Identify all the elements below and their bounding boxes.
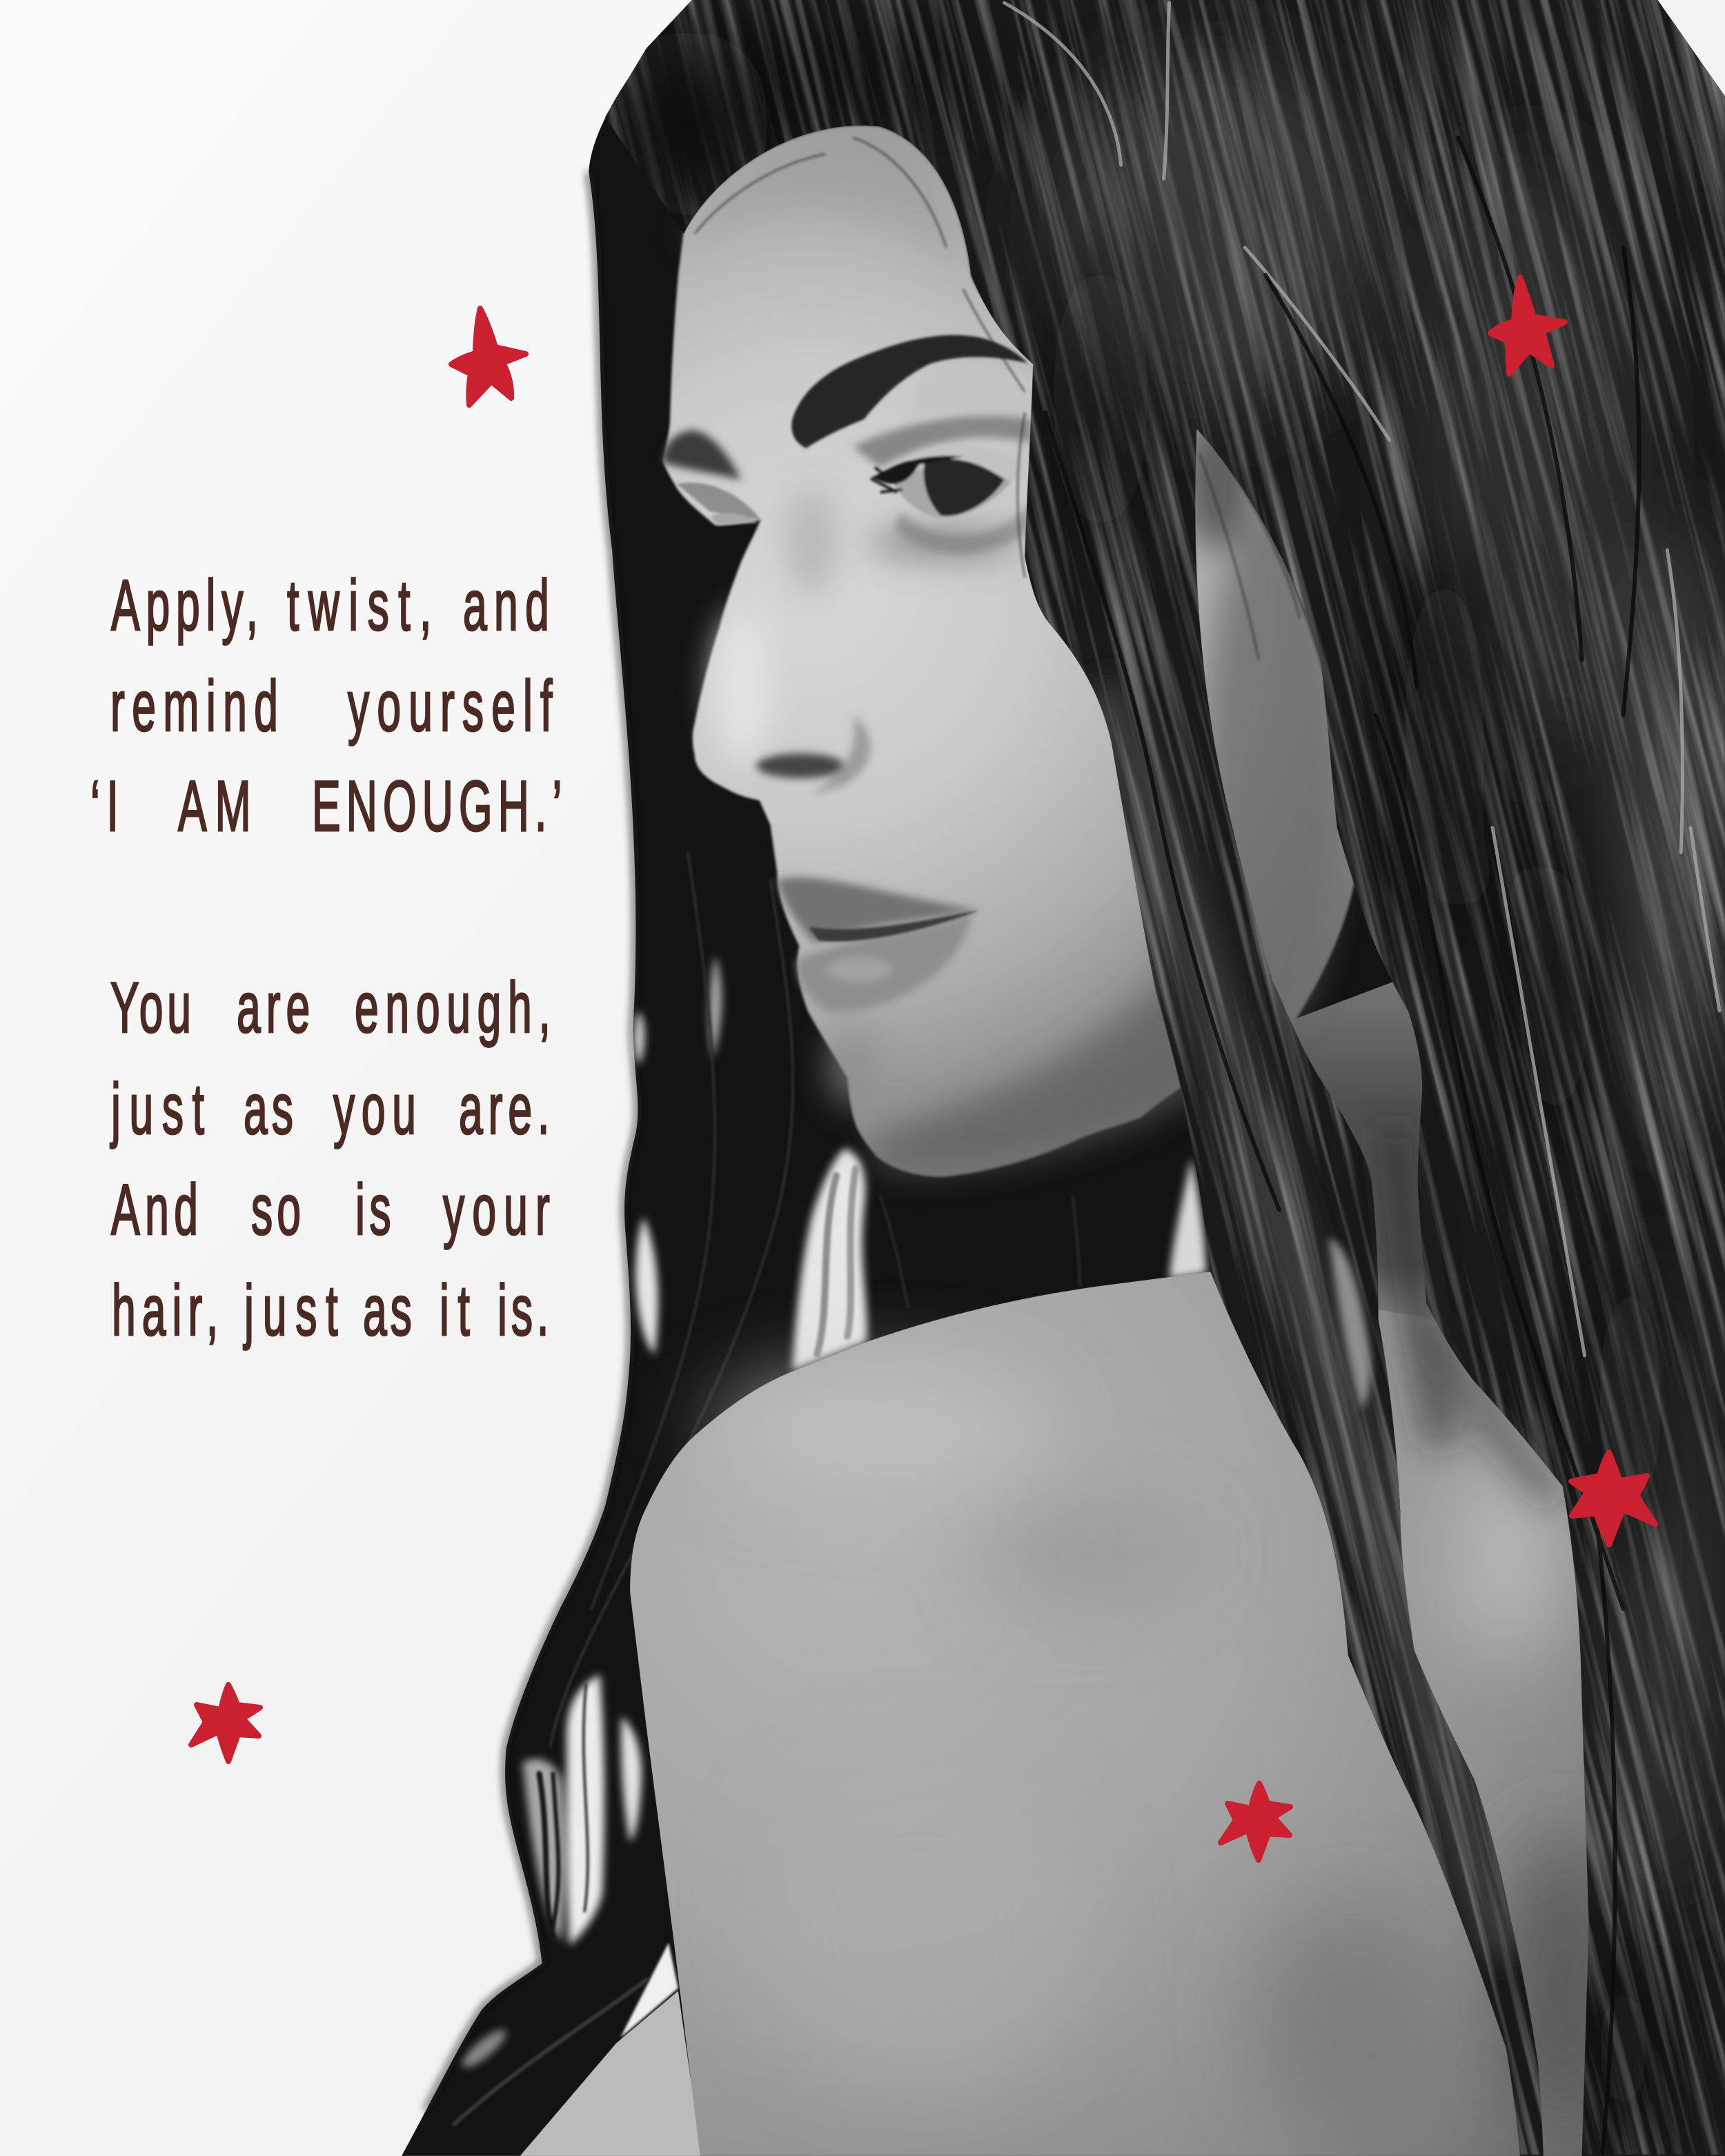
soft hair veil over neck (1392, 1127, 1555, 1499)
under-eye shadow (894, 502, 1032, 553)
soft hair edge (426, 172, 638, 2110)
text line 4 (110, 968, 551, 1048)
portrait photo: woman in profile with long dark hair (402, 0, 1725, 2156)
text line 3: AM (178, 767, 251, 847)
star: upper right in hair (1490, 277, 1565, 374)
text line 1: twist, (287, 566, 431, 646)
star: right on hair (1571, 1452, 1655, 1545)
lower arm (520, 1991, 702, 2156)
neck (1190, 962, 1444, 1320)
text line 7: hair, (112, 1271, 218, 1351)
text line 1: Apply, (111, 566, 258, 646)
star: upper left (451, 308, 526, 405)
left eyebrow (662, 431, 742, 480)
mouth line (809, 910, 979, 942)
text line 2 (110, 666, 553, 746)
text line 7 (112, 1271, 549, 1351)
text line 6: your (443, 1170, 550, 1250)
darker hair masses (605, 28, 1666, 2145)
hairline wisps (695, 137, 1300, 660)
text line 5: are. (459, 1069, 549, 1149)
back hair silhouette (402, 0, 1725, 2156)
text line 4: enough, (355, 968, 551, 1048)
star: on shoulder (1221, 1783, 1290, 1860)
brow bone and eyelid (853, 369, 1032, 468)
text line 2: yourself (348, 666, 553, 746)
right eyebrow (791, 335, 1027, 448)
text line 6: so (251, 1170, 301, 1250)
loose wisps across the gaps (454, 853, 1080, 2124)
hair sheen and streak texture (591, 0, 1725, 2155)
text line 7: it (440, 1271, 470, 1351)
text line 3: ENOUGH.’ (312, 767, 562, 847)
text line 5: you (333, 1069, 416, 1149)
star: lower left (191, 1685, 260, 1761)
text line 6 (111, 1170, 550, 1250)
text line 7: just (243, 1271, 338, 1351)
nostril and nose wing (756, 715, 871, 795)
text line 4: are (237, 968, 310, 1048)
front hair: crown, cheek strand and right side (605, 0, 1725, 2156)
text line 2: remind (110, 666, 278, 746)
hair strands: highlights (1004, 3, 1719, 2153)
text line 5 (110, 1069, 549, 1149)
back and shoulder (630, 1272, 1603, 2156)
lips (777, 878, 979, 1012)
fine hair streaks (591, 0, 1725, 2155)
text line 3 (90, 767, 562, 847)
text line 7: is. (497, 1271, 549, 1351)
bright wedge between hair and arm (620, 1943, 678, 2037)
text line 5: just (110, 1069, 204, 1149)
text line 7: as (363, 1271, 412, 1351)
shoulder light and shadow (716, 1375, 1616, 2145)
text line 6: And (111, 1170, 198, 1250)
text line 6: is (355, 1170, 391, 1250)
text line 5: as (244, 1069, 293, 1149)
text line 1 (111, 566, 549, 646)
text block: affirmation (90, 566, 562, 1351)
skin peeking through hair band (1329, 1238, 1371, 1410)
text line 1: and (463, 566, 549, 646)
right eye (871, 445, 1025, 517)
background gaps through hair (458, 956, 1206, 2073)
text line 4: You (110, 968, 191, 1048)
facial shading (688, 134, 1341, 1171)
face (663, 126, 1355, 1177)
text line 3: ‘I (90, 767, 119, 847)
left eyelid (677, 482, 760, 525)
